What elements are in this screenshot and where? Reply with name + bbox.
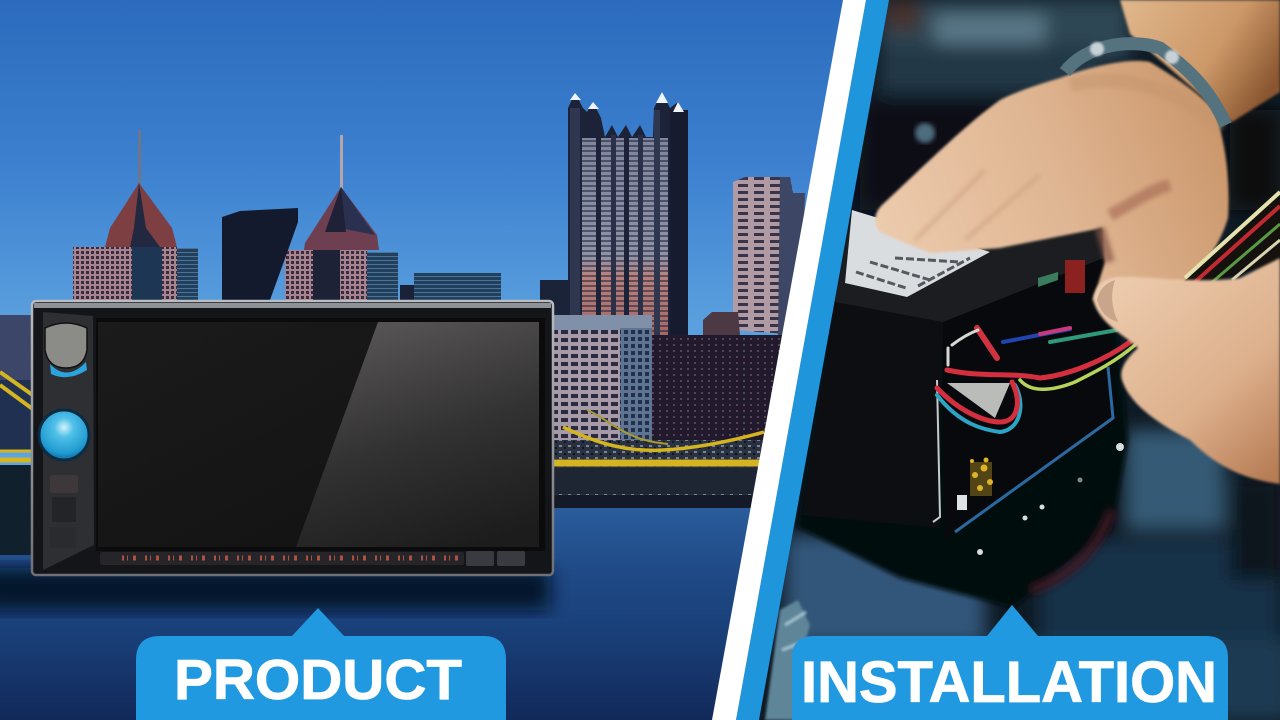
dark shore left of unit (0, 465, 34, 555)
dark reflection under unit (0, 568, 550, 610)
panel: installation photo (730, 0, 1280, 720)
device top (835, 212, 1106, 322)
thumbnail (1097, 280, 1118, 322)
wire loop (937, 328, 1135, 432)
badge shape (136, 608, 506, 720)
yellow bridge (0, 372, 764, 495)
watch highlights (1090, 42, 1179, 64)
thumb hand (1093, 258, 1280, 484)
red connector (1065, 260, 1085, 293)
white edge (933, 380, 940, 522)
label: product (136, 608, 506, 720)
finger gaps and shading (915, 81, 1220, 262)
sky background (0, 0, 860, 540)
left control panel (43, 312, 94, 570)
solder dots (977, 443, 1124, 555)
hand on device (875, 61, 1229, 300)
device side (943, 257, 1118, 540)
blurred workshop background (785, 0, 1280, 720)
unit frame (32, 301, 553, 575)
diagonal divider (712, 0, 889, 720)
silver top rim (34, 303, 551, 308)
top button (45, 323, 87, 368)
white stripe (712, 0, 866, 720)
product text: PRODUCT (174, 648, 462, 712)
wire bundle (1183, 190, 1280, 284)
photo background (736, 34, 860, 720)
white blot (957, 495, 967, 510)
blue trace (955, 367, 1113, 532)
badge shape (792, 605, 1228, 720)
side buttons (50, 475, 78, 548)
screen reflection (296, 322, 539, 547)
screen (98, 322, 539, 547)
knob (39, 410, 89, 460)
black device mass (796, 302, 1131, 608)
skyline buildings (0, 92, 805, 495)
crystal detail (765, 600, 810, 720)
blue accent (50, 362, 87, 377)
label sticker (845, 210, 990, 297)
device front (802, 302, 943, 528)
dark red glow (1030, 510, 1112, 590)
blurred indicator dot (915, 123, 935, 143)
far shore (0, 495, 760, 510)
right buttons (466, 551, 525, 566)
bottom control strip (100, 552, 464, 565)
label: installation (792, 605, 1228, 720)
panel: product scene (0, 0, 860, 720)
blue stripe (736, 0, 889, 720)
arm (1120, 0, 1280, 122)
sticker print (856, 258, 970, 288)
device box (802, 210, 1124, 555)
installation text: INSTALLATION (801, 650, 1217, 715)
green tab (1038, 272, 1058, 287)
water (0, 508, 760, 720)
head unit (32, 301, 553, 575)
gold components (970, 458, 993, 496)
bridge undercarriage (554, 440, 764, 495)
bezel (96, 318, 545, 551)
watch band (1065, 44, 1226, 125)
